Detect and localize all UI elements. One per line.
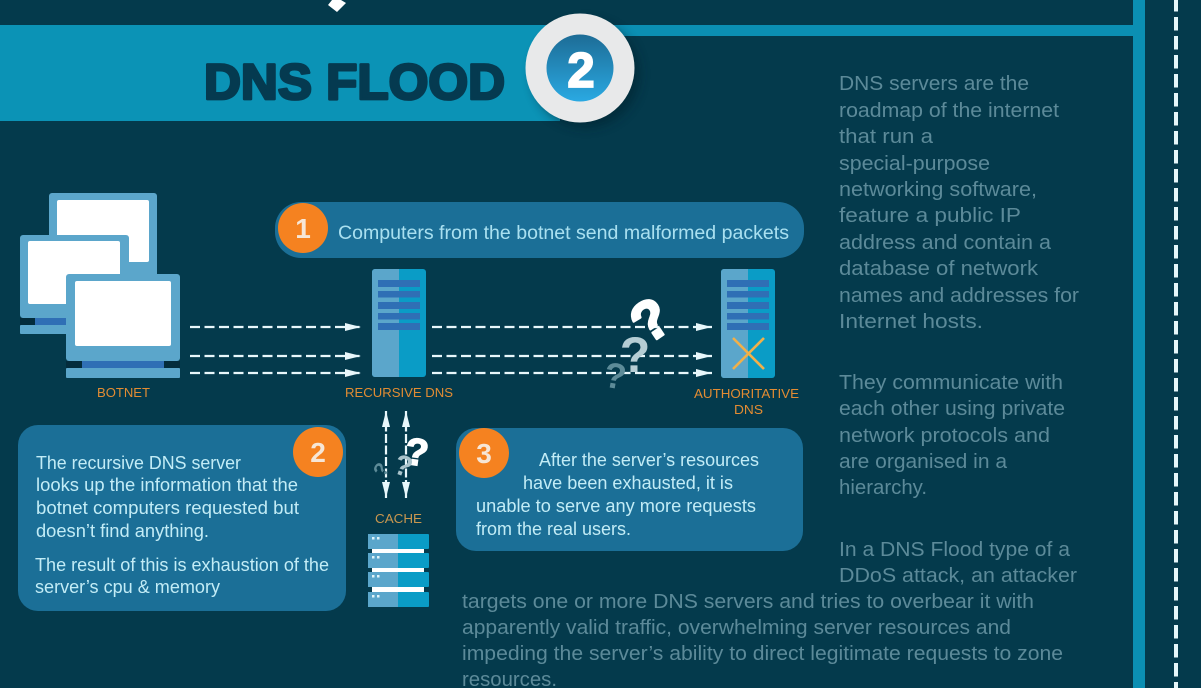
middle monitor [20, 235, 129, 334]
text block: how DNS servers communicate: hierarchy. [839, 477, 927, 499]
icon: botnet computers [20, 193, 180, 378]
icon: cache server stack [368, 534, 429, 607]
text block: what DNS servers are: names and addresses for [839, 285, 1079, 307]
right dashed separator [1174, 0, 1178, 688]
callout 2: The recursive DNS server [36, 453, 241, 473]
section number badge: 2 [567, 44, 595, 98]
callout 3: After the server’s resources [539, 450, 759, 470]
label: recursive DNS: RECURSIVE DNS [345, 385, 453, 400]
right vertical band [1133, 0, 1145, 688]
label: cache: CACHE [375, 511, 422, 526]
text block: what DNS servers are: that run a [839, 126, 934, 148]
arrows: recursive DNS to cache [386, 411, 406, 498]
label: botnet: BOTNET [97, 385, 150, 400]
callout 3: unable to serve any more requests [476, 496, 756, 516]
front monitor [66, 274, 180, 378]
arrows: recursive DNS to authoritative DNS [432, 327, 712, 373]
text block: DNS flood attack description: In a DNS Flood type of a [839, 539, 1071, 561]
question marks: cache path: ? [369, 459, 394, 481]
callout 1: 1 [295, 213, 311, 244]
callout 2: The result of this is exhaustion of the [35, 555, 329, 575]
callout 3: 3 [476, 438, 492, 469]
callout 2: server’s cpu & memory [35, 577, 220, 597]
icon: failure cross [733, 338, 764, 369]
text block: what DNS servers are: DNS servers are the [839, 73, 1029, 95]
text block: what DNS servers are [839, 73, 1079, 333]
text block: how DNS servers communicate: each other using private [839, 398, 1065, 420]
text block: what DNS servers are: feature a public IP [839, 205, 1021, 227]
question marks: authoritative path: ? [620, 327, 650, 383]
label: authoritative DNS [694, 386, 799, 417]
heading: DNS FLOOD [204, 54, 505, 110]
callout 1: Computers from the botnet send malformed packets [338, 223, 789, 244]
callout 2: doesn’t find anything. [36, 521, 209, 541]
arrows: botnet to recursive DNS [190, 327, 361, 373]
back monitor [49, 193, 157, 283]
text block: DNS flood attack description [462, 539, 1077, 688]
question marks: authoritative path: ? [618, 284, 682, 356]
text block: what DNS servers are: address and contain a [839, 232, 1052, 254]
text block: how DNS servers communicate [839, 372, 1065, 499]
text block: what DNS servers are: roadmap of the internet [839, 100, 1059, 122]
text block: DNS flood attack description: DDoS attack, an attacker [839, 565, 1077, 587]
text block: DNS flood attack description: targets one or more DNS servers and tries to overbear it with [462, 591, 1034, 613]
icon: recursive DNS server [372, 269, 426, 377]
header band [0, 25, 1135, 121]
icon: authoritative DNS server [721, 269, 775, 378]
question marks: cache path: ? [389, 448, 417, 485]
callout 2: botnet computers requested but [36, 498, 299, 518]
text block: how DNS servers communicate: are organised in a [839, 451, 1008, 473]
section number badge [526, 14, 640, 128]
label: authoritative DNS: DNS [734, 402, 763, 417]
callout 2 [18, 425, 346, 611]
text block: what DNS servers are: database of network [839, 258, 1039, 280]
text block: how DNS servers communicate: network protocols and [839, 425, 1050, 447]
callout 2: 2 [310, 437, 326, 468]
text block: what DNS servers are: Internet hosts. [839, 311, 983, 333]
callout 2: looks up the information that the [36, 475, 298, 495]
callout 3: have been exhausted, it is [523, 473, 733, 493]
callout 3 [456, 428, 803, 551]
text block: what DNS servers are: networking software, [839, 179, 1037, 201]
question marks: cache path [369, 431, 431, 485]
callout 3: from the real users. [476, 519, 631, 539]
question marks: authoritative path [601, 284, 682, 398]
question marks: cache path: ? [402, 431, 431, 476]
text block: DNS flood attack description: apparently valid traffic, overwhelming server resources and [462, 617, 1011, 639]
text block: DNS flood attack description: impeding the server’s ability to direct legitimate requests to zone [462, 643, 1063, 665]
callout 1 [275, 202, 804, 258]
text block: how DNS servers communicate: They communicate with [839, 372, 1063, 394]
label: authoritative DNS: AUTHORITATIVE [694, 386, 799, 401]
top arrow tip fragment [328, 0, 346, 12]
question marks: authoritative path: ? [601, 354, 630, 398]
text block: what DNS servers are: special-purpose [839, 153, 990, 175]
